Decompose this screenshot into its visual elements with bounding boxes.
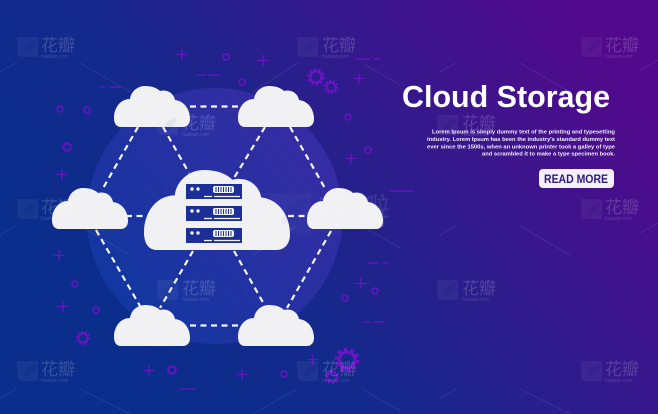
cloud: right bbox=[307, 188, 383, 229]
cloud: left bbox=[52, 188, 128, 229]
server rack bbox=[186, 184, 242, 243]
watermarks: huaban.com bbox=[182, 297, 210, 303]
server unit 1 bbox=[186, 184, 242, 199]
watermarks: 花瓣 bbox=[182, 114, 216, 133]
background circle bbox=[86, 88, 342, 344]
cloud: top left bbox=[114, 86, 190, 127]
watermarks: huaban.com bbox=[605, 54, 633, 60]
read more button: READ MORE bbox=[544, 174, 608, 186]
server unit 2 bbox=[186, 206, 242, 221]
watermarks: huaban.com bbox=[322, 54, 350, 60]
dash marks bbox=[99, 59, 414, 389]
watermarks: huaban.com bbox=[41, 378, 69, 384]
server unit 3 bbox=[186, 228, 242, 243]
watermarks: 花瓣 bbox=[322, 36, 356, 55]
watermarks: 花瓣 bbox=[605, 198, 639, 217]
watermarks: 花瓣 bbox=[462, 114, 496, 133]
watermarks: huaban.com bbox=[605, 378, 633, 384]
decorative icons bbox=[54, 49, 414, 389]
watermarks: 花瓣 bbox=[318, 191, 390, 232]
watermarks: 花瓣 bbox=[182, 279, 216, 298]
ring marks bbox=[57, 54, 378, 377]
description text: Lorem Ipsum is simply dummy text of the printing and typesetting bbox=[432, 130, 616, 136]
central cloud shape bbox=[144, 170, 290, 250]
watermarks: huaban.com bbox=[322, 378, 350, 384]
watermarks: 花瓣 bbox=[605, 36, 639, 55]
description text: ever since the 1500s, when an unknown printer took a galley of type bbox=[427, 144, 615, 150]
plus marks bbox=[54, 49, 366, 380]
description text: and scrambled it to make a type specimen book. bbox=[482, 152, 615, 158]
gears bbox=[62, 69, 358, 383]
watermarks: 花瓣 bbox=[322, 360, 356, 379]
watermarks bbox=[17, 36, 639, 384]
watermarks: huaban.com bbox=[41, 54, 69, 60]
watermarks: huaban.com bbox=[41, 216, 69, 222]
read more button bbox=[539, 169, 614, 188]
cloud: top right bbox=[238, 86, 314, 127]
watermarks: 花瓣 bbox=[462, 279, 496, 298]
watermarks: huaban.com bbox=[462, 132, 490, 138]
dashed connectors bbox=[96, 106, 331, 326]
watermarks: 花瓣 bbox=[41, 198, 75, 217]
watermarks: 花瓣 bbox=[41, 36, 75, 55]
watermarks: huaban.com bbox=[182, 132, 210, 138]
title: Cloud Storage bbox=[402, 80, 610, 114]
central cloud with server bbox=[144, 170, 290, 250]
cloud: bottom left bbox=[114, 305, 190, 346]
description text bbox=[427, 130, 616, 158]
description text: industry. Lorem Ipsum has been the industry's standard dummy text bbox=[427, 137, 615, 143]
watermarks: 花瓣 bbox=[605, 360, 639, 379]
watermarks: 花瓣 bbox=[41, 360, 75, 379]
watermarks: huaban.com bbox=[462, 297, 490, 303]
watermarks: huaban.com bbox=[605, 216, 633, 222]
cloud: bottom right bbox=[238, 305, 314, 346]
